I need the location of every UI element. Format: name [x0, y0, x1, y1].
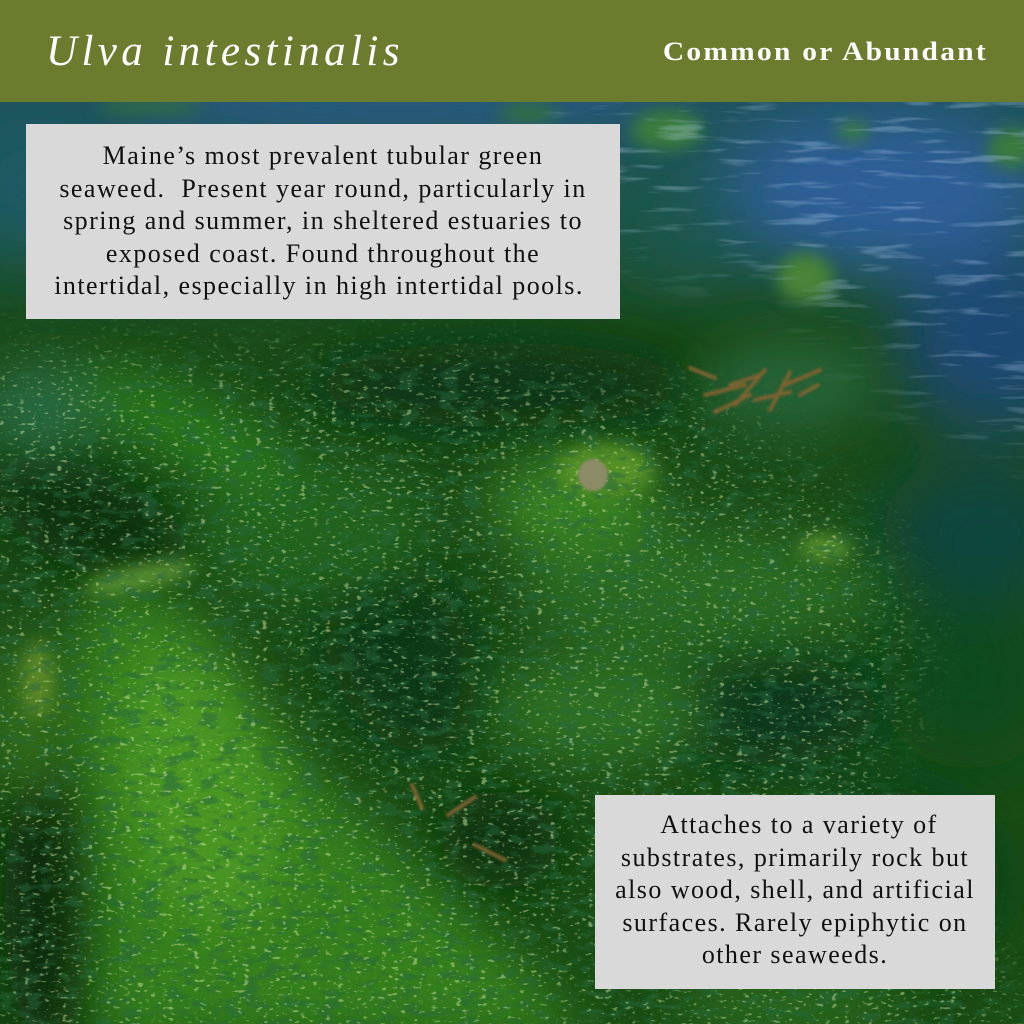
- icon: exposed rock: [578, 459, 608, 491]
- text box: substrates: other seaweeds.: [702, 940, 888, 969]
- text box: substrates: Attaches to a variety of: [660, 810, 938, 839]
- header bar: [0, 0, 1024, 102]
- text box: description: exposed coast. Found throughout the: [106, 238, 540, 268]
- green seaweed mounds: [0, 340, 910, 1024]
- text box: description: [26, 124, 620, 319]
- water ripples: [546, 102, 1024, 478]
- abundance status: Common or Abundant: [663, 37, 988, 66]
- text box: description: Maine’s most prevalent tubular green: [103, 141, 543, 170]
- dark channels: [0, 343, 1000, 1024]
- text box: description: seaweed. Present year round, particularly in: [59, 174, 587, 202]
- seaweed texture: [0, 342, 1024, 1024]
- title: Ulva intestinalis: [46, 28, 404, 75]
- text box: substrates: also wood, shell, and artificial: [615, 875, 975, 904]
- blue water, upper right: [0, 55, 1024, 770]
- text box: description: intertidal, especially in high intertidal pools.: [54, 271, 584, 300]
- brown rockweed clump: [412, 368, 820, 860]
- text box: description: spring and summer, in sheltered estuaries to: [63, 206, 583, 235]
- text box: substrates: surfaces. Rarely epiphytic on: [622, 908, 968, 936]
- text box: substrates: [595, 795, 995, 989]
- text box: substrates: substrates, primarily rock but: [621, 842, 969, 872]
